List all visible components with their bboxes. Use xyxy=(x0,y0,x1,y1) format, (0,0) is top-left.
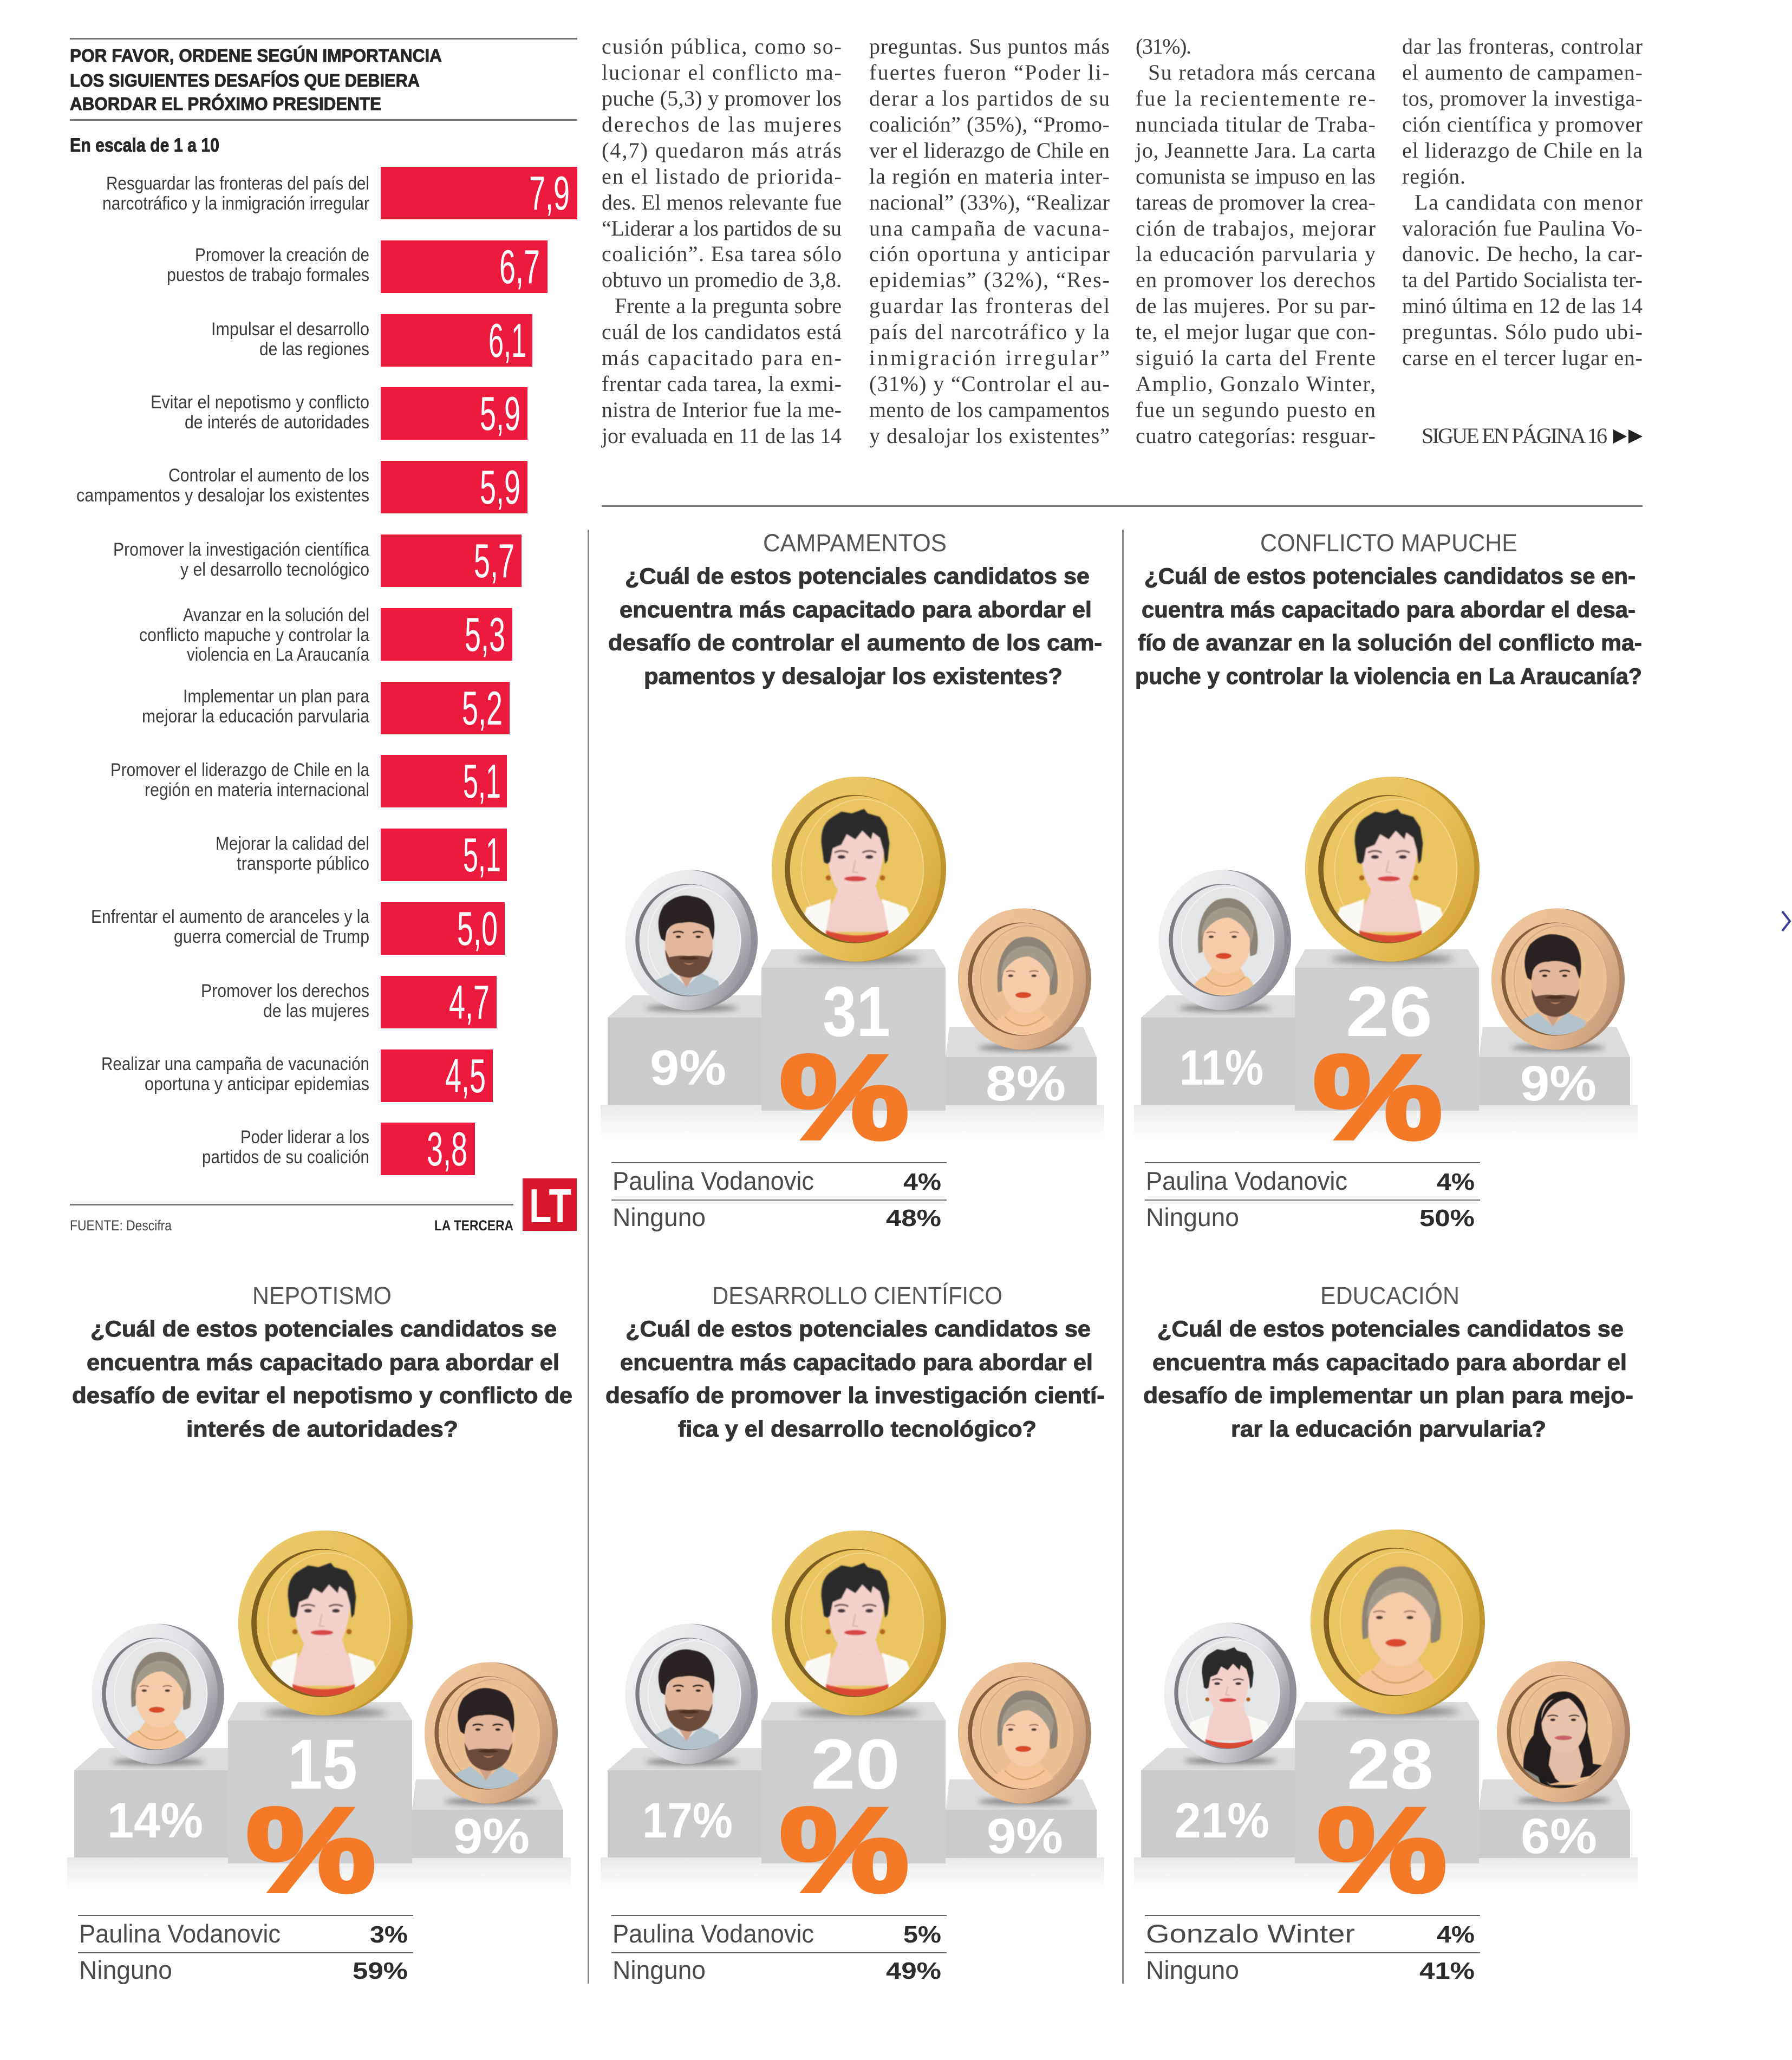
bar: regiones 6,1: Impulsar el desarrollo xyxy=(211,319,369,340)
column 3: tareas de promover la crea- xyxy=(1136,190,1376,214)
bar: nepotismo 5,9: Evitar el nepotismo y conflicto xyxy=(151,392,369,413)
bar: trabajo 6,7 xyxy=(167,240,548,294)
bar: liderazgo 5,1: Promover el liderazgo de Chile en la xyxy=(110,760,369,780)
result: Jara: % xyxy=(1313,1031,1442,1164)
column 4: el liderazgo de Chile en la xyxy=(1402,138,1643,162)
column 1: Frente a la pregunta sobre xyxy=(615,294,842,318)
question xyxy=(1143,1316,1633,1442)
brand name: LA TERCERA xyxy=(434,1217,513,1234)
bar: coalición 3,8: Poder liderar a los xyxy=(240,1127,369,1148)
table: other answers: Gonzalo Winter xyxy=(1146,1919,1355,1948)
column 2: mento de los campamentos xyxy=(869,397,1110,422)
result: Jara xyxy=(1164,1623,1296,1848)
column 4: danovic. De hecho, la car- xyxy=(1402,242,1643,266)
table: other answers: 50% xyxy=(1419,1205,1475,1231)
column 1 xyxy=(601,34,842,448)
result: Matthei xyxy=(1311,1529,1485,1916)
bar: investigación 5,7 xyxy=(113,534,522,588)
heading: EDUCACIÓN xyxy=(1320,1282,1459,1309)
column 1: lucionar el conflicto ma- xyxy=(602,60,842,84)
column 3: fue la recientemente re- xyxy=(1136,86,1376,110)
table: other answers xyxy=(1145,1915,1480,1984)
column 4: ta del Partido Socialista ter- xyxy=(1402,268,1643,292)
continuation note: SIGUE EN PÁGINA 16 xyxy=(1422,423,1607,448)
question: rar la educación parvularia? xyxy=(1231,1416,1546,1442)
column 4 xyxy=(1402,34,1643,370)
column 1: nistra de Interior fue la me- xyxy=(602,397,842,422)
question: desafío de promover la investigación cientí- xyxy=(605,1383,1105,1408)
column 1: “Liderar a los partidos de su xyxy=(602,216,842,240)
bar: transporte 5,1: Mejorar la calidad del xyxy=(216,833,369,854)
bar: educación 5,2: 5,2 xyxy=(462,681,503,735)
column 3: fue un segundo puesto en xyxy=(1136,397,1376,422)
bar: transporte 5,1 xyxy=(216,828,507,882)
bar: liderazgo 5,1 xyxy=(110,754,507,808)
bar: liderazgo 5,1: región en materia internacional xyxy=(145,780,369,800)
column 2: la región en materia inter- xyxy=(869,164,1110,188)
chart panel: challenges ranking xyxy=(70,38,577,1234)
bar: educación 5,2 xyxy=(142,681,510,735)
result: Jara: % xyxy=(246,1783,375,1916)
question: puche y controlar la violencia en La Araucanía? xyxy=(1135,663,1642,689)
column 3 xyxy=(1135,34,1376,448)
column 3: de las mujeres. Por su par- xyxy=(1136,294,1376,318)
column 3: Amplio, Gonzalo Winter, xyxy=(1136,371,1376,396)
table: other answers: Paulina Vodanovic xyxy=(612,1919,814,1948)
table: other answers: 59% xyxy=(353,1958,408,1984)
question xyxy=(605,1316,1105,1442)
result: Winter: 9% xyxy=(650,1040,726,1096)
table: other answers xyxy=(611,1915,947,1984)
table: other answers: Ninguno xyxy=(79,1955,172,1984)
result: Jara: % xyxy=(780,1783,909,1916)
column 4: tos, promover la investiga- xyxy=(1402,86,1643,110)
panel: educación xyxy=(1134,1282,1638,1984)
column 1: puche (5,3) y promover los xyxy=(602,86,842,110)
podium xyxy=(1134,949,1638,1137)
result: Jara xyxy=(772,777,946,1164)
result: Matthei: 11% xyxy=(1180,1040,1263,1096)
bar: coalición 3,8 xyxy=(202,1122,475,1176)
result: Vodanovic: 6% xyxy=(1521,1809,1597,1864)
column 4: el aumento de campamen- xyxy=(1402,60,1643,84)
column 1: coalición”. Esa tarea sólo xyxy=(602,242,842,266)
column 3: cuatro categorías: resguar- xyxy=(1136,423,1376,448)
bar: mujeres 4,7: de las mujeres xyxy=(263,1001,369,1021)
bar: campamentos 5,9 xyxy=(76,460,527,514)
column 1: jor evaluada en 11 de las 14 xyxy=(601,423,842,448)
column 1: des. El menos relevante fue xyxy=(602,190,842,214)
table: other answers: 48% xyxy=(886,1205,941,1231)
bar: aranceles 5,0 xyxy=(91,902,505,955)
table: other answers: 3% xyxy=(370,1921,408,1948)
question xyxy=(72,1316,572,1442)
table: other answers: Ninguno xyxy=(1146,1955,1239,1984)
result: Jara: 21% xyxy=(1175,1793,1269,1848)
column 1: frentar cada tarea, la exmi- xyxy=(602,371,842,396)
column 4: preguntas. Sólo pudo ubi- xyxy=(1402,320,1643,344)
podium xyxy=(601,1702,1104,1890)
result: Jara xyxy=(1305,777,1480,1164)
bar: aranceles 5,0: 5,0 xyxy=(457,902,498,955)
question xyxy=(1135,563,1642,689)
column 4: minó última en 12 de las 14 xyxy=(1402,294,1643,318)
column 4: La candidata con menor xyxy=(1415,190,1643,214)
result: Winter xyxy=(625,870,758,1096)
table: other answers: Ninguno xyxy=(612,1203,706,1231)
table: other answers: Ninguno xyxy=(612,1955,706,1984)
question: desafío de implementar un plan para mejo- xyxy=(1143,1383,1633,1408)
bar: fronteras 7,9: 7,9 xyxy=(529,166,570,220)
bar: campamentos 5,9: Controlar el aumento de los xyxy=(168,465,369,486)
bar: regiones 6,1: de las regiones xyxy=(259,339,369,360)
column 1: más capacitado para en- xyxy=(602,345,842,370)
bar: trabajo 6,7: 6,7 xyxy=(499,240,540,294)
question: ¿Cuál de estos potenciales candidatos se xyxy=(625,1316,1091,1341)
result: Jara: 26 xyxy=(1346,972,1432,1051)
result: Matthei: % xyxy=(1318,1783,1446,1916)
bar: regiones 6,1: 6,1 xyxy=(488,314,526,367)
bar: vacunación 4,5: Realizar una campaña de vacunación xyxy=(101,1054,369,1074)
icon: page chevron xyxy=(1782,911,1790,931)
bar: vacunación 4,5 xyxy=(101,1049,493,1103)
podium xyxy=(601,949,1104,1137)
question: encuentra más capacitado para abordar el xyxy=(620,1350,1093,1375)
result: Winter xyxy=(425,1663,558,1864)
column 2: guardar las fronteras del xyxy=(869,294,1110,318)
bar: educación 5,2: mejorar la educación parvularia xyxy=(142,706,369,727)
question: ¿Cuál de estos potenciales candidatos se xyxy=(625,563,1090,589)
question: interés de autoridades? xyxy=(186,1416,458,1442)
bar: aranceles 5,0: guerra comercial de Trump xyxy=(174,927,369,947)
column 2: ver el liderazgo de Chile en xyxy=(869,138,1110,162)
column 1: cusión pública, como so- xyxy=(602,34,842,58)
result: Matthei: 9% xyxy=(987,1809,1063,1864)
table: other answers: 4% xyxy=(903,1169,941,1195)
article text columns xyxy=(601,34,1643,448)
bar: conflicto mapuche 5,3: conflicto mapuche y controlar la xyxy=(139,625,369,646)
bar: investigación 5,7: Promover la investigación científica xyxy=(113,539,369,560)
bar: nepotismo 5,9 xyxy=(151,387,527,440)
panel: desarrollo científico xyxy=(601,1282,1105,1984)
column 1: (4,7) quedaron más atrás xyxy=(602,138,842,162)
bar: nepotismo 5,9: de interés de autoridades xyxy=(185,412,369,433)
question: desafío de controlar el aumento de los cam- xyxy=(608,630,1102,655)
question: encuentra más capacitado para abordar el xyxy=(87,1350,559,1375)
column 2: y desalojar los existentes” xyxy=(869,423,1110,448)
column 2: (31%) y “Controlar el au- xyxy=(869,371,1110,396)
result: Jara xyxy=(238,1530,413,1916)
podium xyxy=(67,1702,571,1890)
result: Matthei xyxy=(92,1624,224,1848)
panel: conflicto mapuche xyxy=(1134,529,1642,1231)
column 3: nunciada titular de Traba- xyxy=(1136,112,1376,136)
column 4: carse en el tercer lugar en- xyxy=(1402,345,1643,370)
result: Vodanovic xyxy=(1497,1661,1630,1864)
question: desafío de evitar el nepotismo y conflicto de xyxy=(72,1383,572,1408)
question: ¿Cuál de estos potenciales candidatos se en- xyxy=(1144,563,1635,589)
bar: vacunación 4,5: oportuna y anticipar epidemias xyxy=(145,1074,369,1094)
column 4: valoración fue Paulina Vo- xyxy=(1402,216,1643,240)
table: other answers xyxy=(78,1915,413,1984)
column 1: cuál de los candidatos está xyxy=(602,320,842,344)
bar: trabajo 6,7: puestos de trabajo formales xyxy=(167,265,369,285)
question: fica y el desarrollo tecnológico? xyxy=(678,1416,1037,1442)
column 2: coalición” (35%), “Promo- xyxy=(869,112,1110,136)
bar: campamentos 5,9: 5,9 xyxy=(480,460,520,514)
question: cuentra más capacitado para abordar el desa- xyxy=(1142,597,1635,622)
chart title xyxy=(70,45,442,114)
bar: investigación 5,7: y el desarrollo tecnológico xyxy=(180,559,369,580)
column 3: siguió la carta del Frente xyxy=(1136,345,1376,370)
question: pamentos y desalojar los existentes? xyxy=(644,663,1063,689)
column 4: región. xyxy=(1402,164,1465,188)
bar: trabajo 6,7: Promover la creación de xyxy=(195,245,369,265)
table: other answers: Paulina Vodanovic xyxy=(1146,1166,1347,1195)
table: other answers: 5% xyxy=(903,1921,941,1948)
panel: campamentos xyxy=(601,529,1104,1231)
result: Winter: 17% xyxy=(642,1793,733,1848)
column 3: jo, Jeannette Jara. La carta xyxy=(1135,138,1376,162)
column 2: país del narcotráfico y la xyxy=(869,320,1110,344)
bar: coalición 3,8: 3,8 xyxy=(427,1122,467,1176)
panel: nepotismo xyxy=(67,1282,572,1984)
heading: CAMPAMENTOS xyxy=(763,529,947,557)
question xyxy=(608,563,1102,689)
column 3: Su retadora más cercana xyxy=(1148,60,1376,84)
column 1: obtuvo un promedio de 3,8. xyxy=(602,268,842,292)
chart title: ABORDAR EL PRÓXIMO PRESIDENTE xyxy=(70,94,381,114)
column 2: preguntas. Sus puntos más xyxy=(869,34,1110,58)
result: Winter xyxy=(1491,909,1625,1111)
result: Jara: 20 xyxy=(811,1724,900,1804)
logo: LT: LT xyxy=(529,1179,571,1233)
result: Matthei: 8% xyxy=(986,1056,1066,1111)
result: Matthei: 28 xyxy=(1347,1724,1433,1804)
column 2 xyxy=(869,34,1110,448)
column 3: en promover los derechos xyxy=(1136,268,1376,292)
result: Jara: 31 xyxy=(823,972,890,1051)
table: other answers: 49% xyxy=(886,1958,941,1984)
bar: fronteras 7,9: narcotráfico y la inmigración irregular xyxy=(102,193,369,214)
result: Jara: % xyxy=(780,1031,909,1164)
table: other answers: 4% xyxy=(1437,1169,1475,1195)
bar: transporte 5,1: 5,1 xyxy=(463,828,501,882)
column 4: ción científica y promover xyxy=(1402,112,1643,136)
result: Jara: 15 xyxy=(288,1724,357,1804)
bar: conflicto mapuche 5,3: 5,3 xyxy=(465,608,505,661)
heading: CONFLICTO MAPUCHE xyxy=(1260,529,1517,557)
bar: conflicto mapuche 5,3 xyxy=(139,605,512,665)
column 3: comunista se impuso en las xyxy=(1136,164,1376,188)
result: Matthei xyxy=(1159,870,1291,1096)
source note: FUENTE: Descifra xyxy=(70,1217,172,1234)
column 3: (31%). xyxy=(1136,34,1191,58)
bar: aranceles 5,0: Enfrentar el aumento de aranceles y la xyxy=(91,907,369,927)
column 3: te, el mejor lugar que con- xyxy=(1136,320,1376,344)
bar: mujeres 4,7 xyxy=(201,975,497,1029)
column 2: inmigración irregular” xyxy=(869,345,1110,370)
question: encuentra más capacitado para abordar el xyxy=(620,597,1092,622)
result: Winter: 9% xyxy=(1520,1056,1596,1111)
column 4: dar las fronteras, controlar xyxy=(1402,34,1643,58)
heading: DESARROLLO CIENTÍFICO xyxy=(712,1282,1002,1309)
table: other answers: Ninguno xyxy=(1146,1203,1239,1231)
question: fío de avanzar en la solución del conflicto ma- xyxy=(1138,630,1642,655)
bar: vacunación 4,5: 4,5 xyxy=(445,1049,486,1103)
column 3: ción de trabajos, mejorar xyxy=(1136,216,1376,240)
column 2: una campaña de vacuna- xyxy=(869,216,1110,240)
table: other answers xyxy=(1145,1162,1480,1231)
column 2: fuertes fueron “Poder li- xyxy=(869,60,1110,84)
result: Matthei xyxy=(958,909,1091,1111)
table: other answers: Paulina Vodanovic xyxy=(79,1919,281,1948)
table: other answers: 4% xyxy=(1437,1921,1475,1948)
bar: investigación 5,7: 5,7 xyxy=(474,534,514,588)
result: Matthei xyxy=(958,1663,1091,1864)
bar: liderazgo 5,1: 5,1 xyxy=(463,754,501,808)
bar: campamentos 5,9: campamentos y desalojar los existentes xyxy=(76,485,369,506)
bar: educación 5,2: Implementar un plan para xyxy=(183,686,369,707)
table: other answers xyxy=(611,1162,947,1231)
table: other answers: Paulina Vodanovic xyxy=(612,1166,814,1195)
bar: transporte 5,1: transporte público xyxy=(237,853,369,874)
column 2: epidemias” (32%), “Res- xyxy=(869,268,1110,292)
bar: regiones 6,1 xyxy=(211,314,532,367)
question: ¿Cuál de estos potenciales candidatos se xyxy=(90,1316,557,1341)
podium xyxy=(1134,1702,1638,1890)
result: Matthei: 14% xyxy=(107,1793,203,1848)
column 2: ción oportuna y anticipar xyxy=(869,242,1110,266)
bar: nepotismo 5,9: 5,9 xyxy=(480,387,520,440)
column 1: en el listado de priorida- xyxy=(602,164,842,188)
chart title: POR FAVOR, ORDENE SEGÚN IMPORTANCIA xyxy=(70,45,442,66)
column 1: derechos de las mujeres xyxy=(602,112,842,136)
question: ¿Cuál de estos potenciales candidatos se xyxy=(1157,1316,1624,1341)
result: Winter: 9% xyxy=(453,1809,530,1864)
question: encuentra más capacitado para abordar el xyxy=(1152,1350,1627,1375)
bar: fronteras 7,9: Resguardar las fronteras del país del xyxy=(106,173,369,194)
bar: mujeres 4,7: Promover los derechos xyxy=(201,981,369,1001)
column 2: nacional” (33%), “Realizar xyxy=(869,190,1110,214)
bar: conflicto mapuche 5,3: Avanzar en la solución del xyxy=(183,605,369,625)
column 3: la educación parvularia y xyxy=(1136,242,1376,266)
bar: conflicto mapuche 5,3: violencia en La Araucanía xyxy=(187,644,369,665)
bar: mujeres 4,7: 4,7 xyxy=(449,975,490,1029)
result: Jara xyxy=(772,1530,946,1916)
heading: NEPOTISMO xyxy=(252,1282,392,1309)
column 2: derar a los partidos de su xyxy=(869,86,1110,110)
bar: fronteras 7,9 xyxy=(102,166,577,220)
chart title: LOS SIGUIENTES DESAFÍOS QUE DEBIERA xyxy=(70,70,420,90)
scale subtitle: En escala de 1 a 10 xyxy=(70,135,219,156)
bar: coalición 3,8: partidos de su coalición xyxy=(202,1147,369,1168)
result: Winter xyxy=(625,1624,758,1848)
table: other answers: 41% xyxy=(1419,1958,1475,1984)
